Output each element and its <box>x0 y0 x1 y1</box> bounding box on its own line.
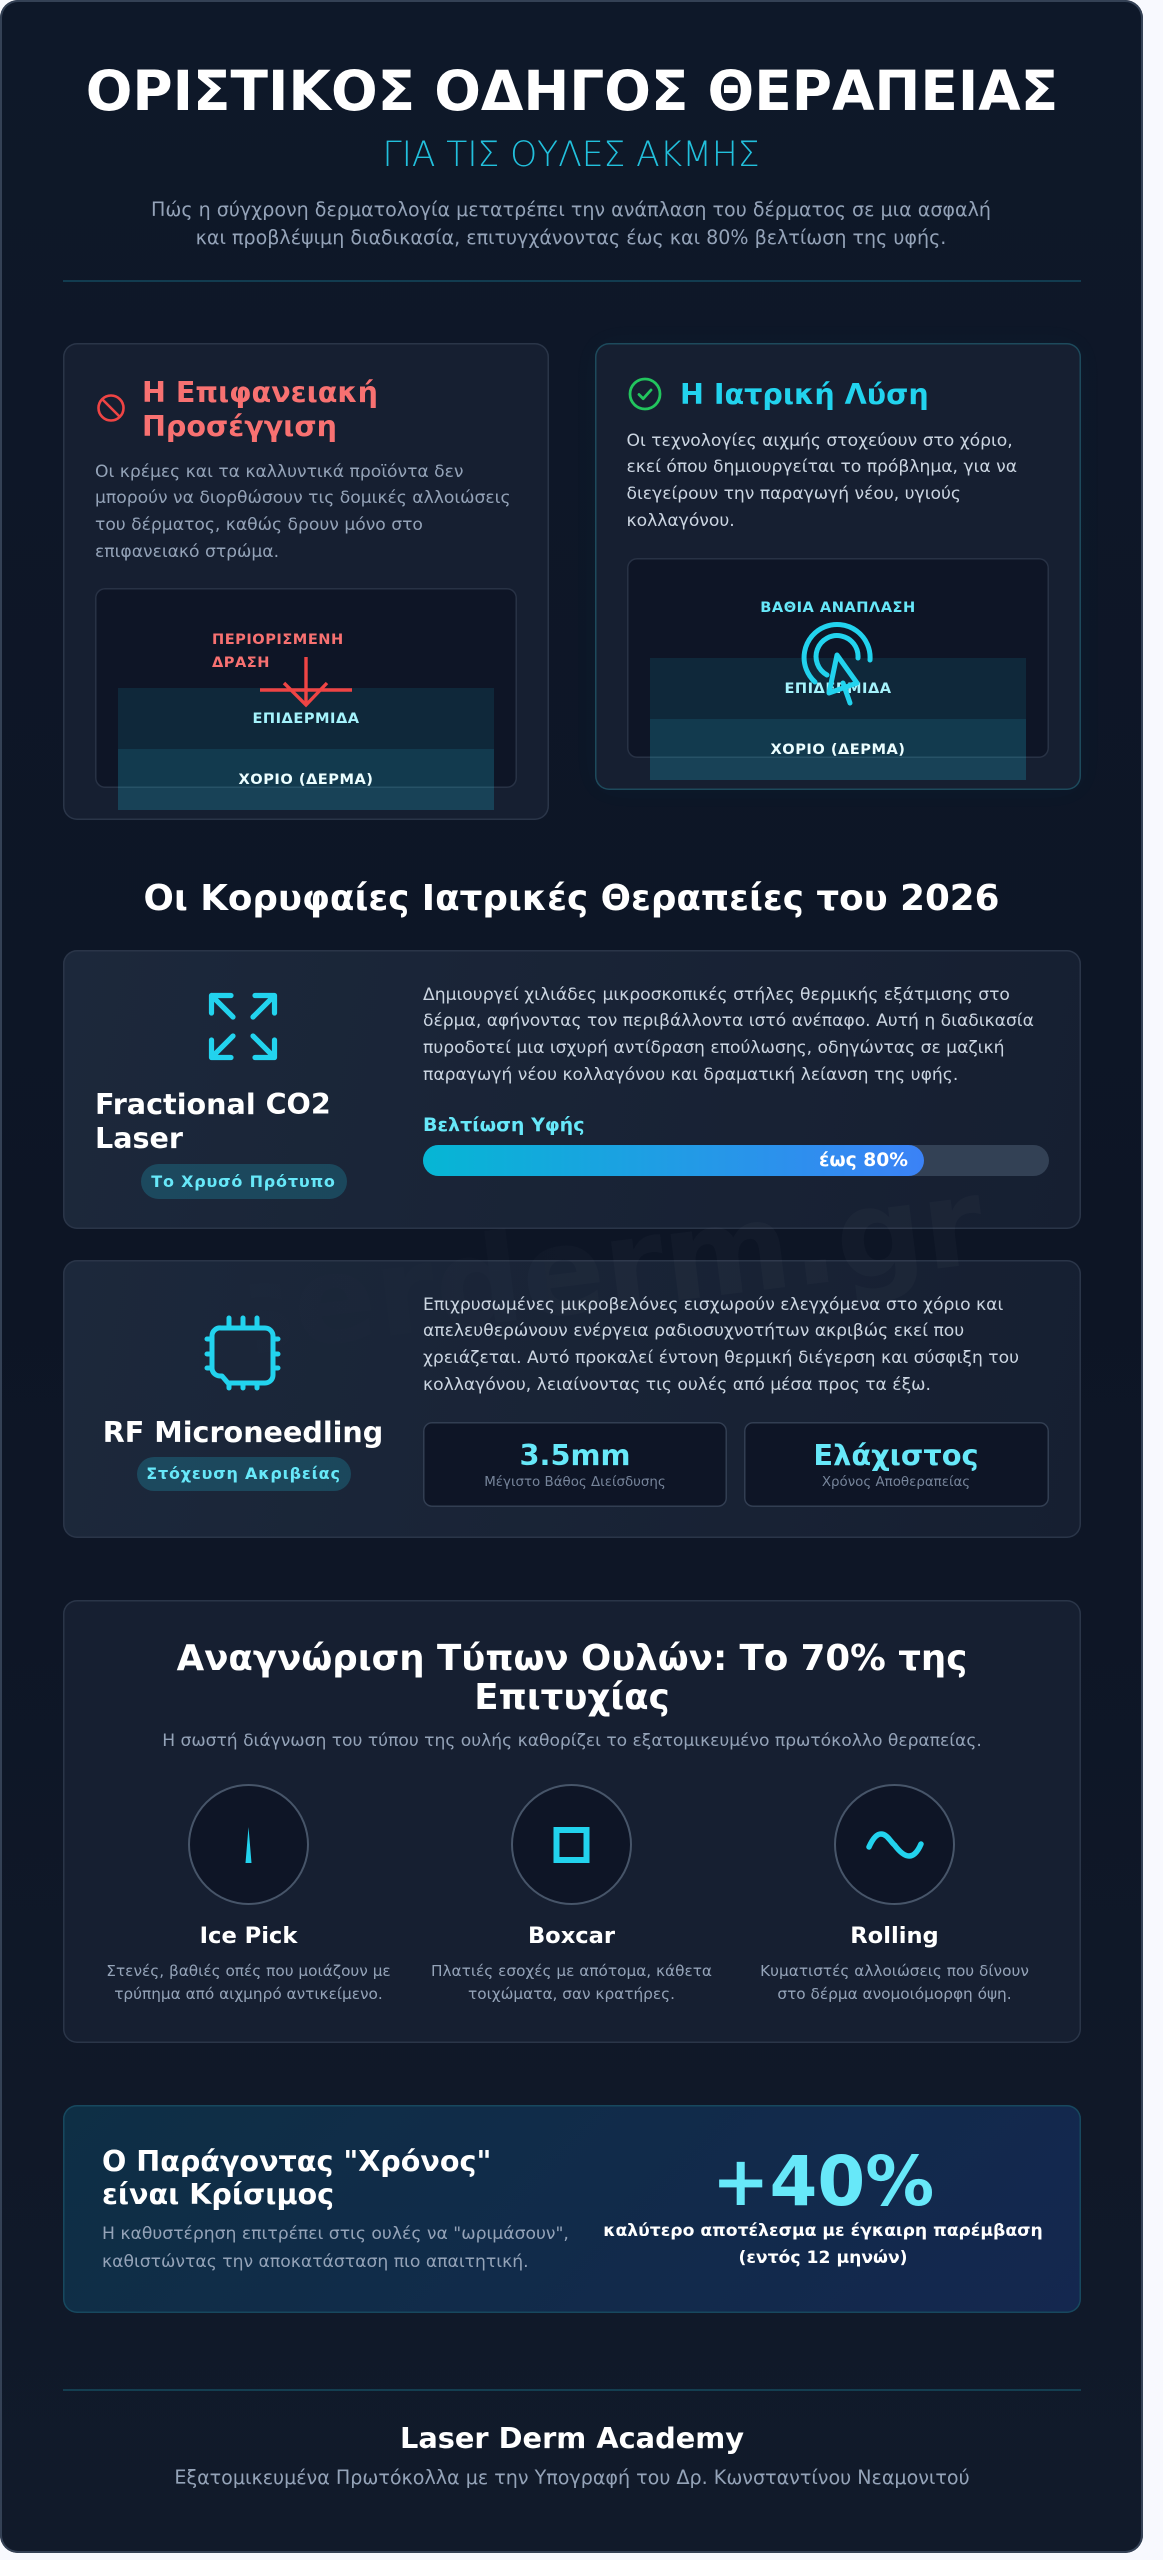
description: Οι κρέμες και τα καλλυντικά προϊόντα δεν <box>95 462 463 482</box>
icon: chip <box>204 1316 280 1390</box>
intro text <box>151 199 991 248</box>
description: μπορούν να διορθώσουν τις δομικές αλλοιώσεις <box>95 488 511 508</box>
dermis layer <box>118 749 494 810</box>
label: limited action <box>212 630 344 670</box>
description: απελευθερώνουν ενέργεια ραδιοσυχνοτήτων ακριβώς εκεί που <box>423 1321 964 1341</box>
stat: max depth <box>423 1422 727 1507</box>
description <box>423 1294 1019 1395</box>
name: Boxcar <box>528 1923 615 1949</box>
description: καθιστώντας την αποκατάσταση πιο απαιτητική. <box>102 2252 529 2272</box>
badge <box>136 1457 350 1491</box>
panel: superficial approach <box>63 343 549 820</box>
description: Πλατιές εσοχές με απότομα, κάθετα <box>431 1962 712 1980</box>
heading: Η Ιατρική Λύση <box>680 377 929 411</box>
label: epidermis: ΕΠΙΔΕΡΜΙΔΑ <box>252 710 360 727</box>
heading <box>142 375 378 443</box>
stat caption <box>603 2220 1043 2268</box>
panel: time factor callout <box>63 2105 1081 2313</box>
treatment name: Laser <box>95 1121 183 1155</box>
panel: medical solution <box>595 343 1081 790</box>
description: Δημιουργεί χιλιάδες μικροσκοπικές στήλες θερμικής εξάτμισης στο <box>423 984 1010 1004</box>
intro text: Πώς η σύγχρονη δερματολογία μετατρέπει την ανάπλαση του δέρματος σε μια ασφαλή <box>151 199 991 221</box>
footer <box>174 2421 970 2489</box>
heading: Επιτυχίας <box>474 1677 670 1718</box>
panel: fractional CO2 laser <box>63 950 1081 1229</box>
diagram: limited action <box>95 588 517 788</box>
epidermis layer <box>650 658 1026 719</box>
label: deep regeneration: ΒΑΘΙΑ ΑΝΑΠΛΑΣΗ <box>760 599 916 616</box>
badge <box>140 1164 346 1199</box>
stat caption: καλύτερο αποτέλεσμα με έγκαιρη παρέμβαση <box>603 2220 1043 2240</box>
description: τοιχώματα, σαν κρατήρες. <box>468 1984 675 2002</box>
treatment name: Fractional CO2 <box>95 1087 331 1121</box>
name: Rolling <box>850 1923 939 1949</box>
description: Στενές, βαθιές οπές που μοιάζουν με <box>106 1962 391 1980</box>
description <box>102 2224 569 2272</box>
heading: Αναγνώριση Τύπων Ουλών: Το 70% της <box>177 1638 967 1679</box>
header <box>86 59 1058 248</box>
description: εκεί όπου δημιουργείται το πρόβλημα, για να <box>626 457 1017 477</box>
caption: Μέγιστο Βάθος Διείσδυσης <box>484 1474 666 1490</box>
icon: prohibited <box>97 394 125 422</box>
panel: RF microneedling <box>63 1260 1081 1538</box>
badge: Στόχευση Ακριβείας <box>146 1464 341 1483</box>
arrow: stops at surface <box>260 657 352 708</box>
description <box>431 1962 712 2002</box>
caption: Χρόνος Αποθεραπείας <box>822 1474 970 1490</box>
stat: downtime <box>744 1422 1049 1507</box>
brand: Laser Derm Academy <box>400 2421 744 2455</box>
icon: rolling <box>834 1784 955 1905</box>
panel: scar types <box>63 1600 1081 2043</box>
scar type: rolling <box>760 1784 1029 2002</box>
description: κολλαγόνου, λειαίνοντας τις ουλές από μέσα προς τα έξω. <box>423 1375 931 1395</box>
description: Επιχρυσωμένες μικροβελόνες εισχωρούν ελεγχόμενα στο χόριο και <box>423 1294 1003 1314</box>
scar type: ice pick <box>106 1784 391 2002</box>
description: Οι τεχνολογίες αιχμής στοχεύουν στο χόριο, <box>626 430 1013 450</box>
icon: expand arrows <box>208 992 278 1060</box>
description: Η καθυστέρηση επιτρέπει στις ουλές να "ωριμάσουν", <box>102 2224 569 2244</box>
icon: check circle <box>628 378 662 410</box>
description: παραγωγή νέου κολλαγόνου και δραματική λείανση της υφής. <box>423 1065 958 1085</box>
scar type: boxcar <box>431 1784 712 2002</box>
big stat: +40% <box>712 2142 934 2222</box>
progress bar: up to 80% <box>423 1145 1049 1176</box>
epidermis layer <box>118 688 494 749</box>
icon: boxcar <box>511 1784 632 1905</box>
icon: laser pointer target <box>802 622 873 706</box>
value: Ελάχιστος <box>813 1438 979 1472</box>
label: epidermis: ΕΠΙΔΕΡΜΙΔΑ <box>784 680 892 696</box>
intro text: και προβλέψιμη διαδικασία, επιτυγχάνοντας έως και 80% βελτίωση της υφής. <box>196 226 946 248</box>
label: limited action: ΔΡΑΣΗ <box>212 654 270 670</box>
description: κολλαγόνου. <box>626 511 735 531</box>
badge: Το Χρυσό Πρότυπο <box>151 1172 336 1191</box>
signature: Εξατομικευμένα Πρωτόκολλα με την Υπογραφή του Δρ. Κωνσταντίνου Νεαμονιτού <box>174 2466 970 2489</box>
progress label: Βελτίωση Υφής <box>423 1114 584 1136</box>
heading: Προσέγγιση <box>142 409 337 443</box>
heading: είναι Κρίσιμος <box>102 2177 334 2211</box>
description: χρειάζεται. Αυτό προκαλεί έντονη θερμική διέγερση και σύσφιξη του <box>423 1348 1019 1368</box>
description: τρύπημα από αιχμηρό αντικείμενο. <box>114 1984 383 2002</box>
subheading: Η σωστή διάγνωση του τύπου της ουλής καθορίζει το εξατομικευμένο πρωτόκολλο θεραπείας. <box>162 1731 982 1751</box>
label: limited action: ΠΕΡΙΟΡΙΣΜΕΝΗ <box>212 630 344 648</box>
section heading: treatments: Οι Κορυφαίες Ιατρικές Θεραπείες του 2026 <box>144 878 999 919</box>
description <box>626 430 1017 531</box>
bar fill <box>423 1145 924 1176</box>
heading: Ο Παράγοντας "Χρόνος" <box>102 2144 491 2178</box>
description: διεγείρουν την παραγωγή νέου, υγιούς <box>626 484 961 504</box>
value: 3.5mm <box>519 1438 631 1472</box>
treatment name <box>95 1087 331 1155</box>
name: Ice Pick <box>200 1923 297 1949</box>
description: του δέρματος, καθώς δρουν μόνο στο <box>95 515 423 535</box>
description: δέρμα, αφήνοντας τον περιβάλλοντα ιστό ανέπαφο. Αυτή η διαδικασία <box>423 1011 1034 1031</box>
description <box>760 1962 1029 2002</box>
label: dermis: ΧΟΡΙΟ (ΔΕΡΜΑ) <box>771 741 905 758</box>
label: dermis: ΧΟΡΙΟ (ΔΕΡΜΑ) <box>239 771 373 788</box>
watermark: laserderm.gr <box>89 1150 991 1400</box>
icon: ice pick <box>188 1784 309 1905</box>
description: επιφανειακό στρώμα. <box>95 542 279 562</box>
diagram: deep regeneration <box>627 558 1049 758</box>
treatment name: RF Microneedling <box>103 1415 383 1449</box>
heading: Η Επιφανειακή <box>142 375 378 409</box>
subtitle: ΓΙΑ ΤΙΣ ΟΥΛΕΣ ΑΚΜΗΣ <box>383 134 759 174</box>
description: Κυματιστές αλλοιώσεις που δίνουν <box>760 1962 1029 1980</box>
dermis layer <box>650 719 1026 780</box>
description <box>423 984 1034 1085</box>
description <box>106 1962 391 2002</box>
title: ΟΡΙΣΤΙΚΟΣ ΟΔΗΓΟΣ ΘΕΡΑΠΕΙΑΣ <box>86 59 1058 123</box>
description <box>95 462 511 562</box>
heading <box>176 1638 967 1718</box>
bar fill: έως 80% <box>819 1150 908 1171</box>
description: πυροδοτεί μια ισχυρή αντίδραση επούλωσης, οδηγώντας σε μαζική <box>423 1038 1004 1058</box>
description: στο δέρμα ανομοιόμορφη όψη. <box>777 1984 1012 2002</box>
stat caption: (εντός 12 μηνών) <box>738 2248 908 2268</box>
heading <box>102 2144 491 2211</box>
